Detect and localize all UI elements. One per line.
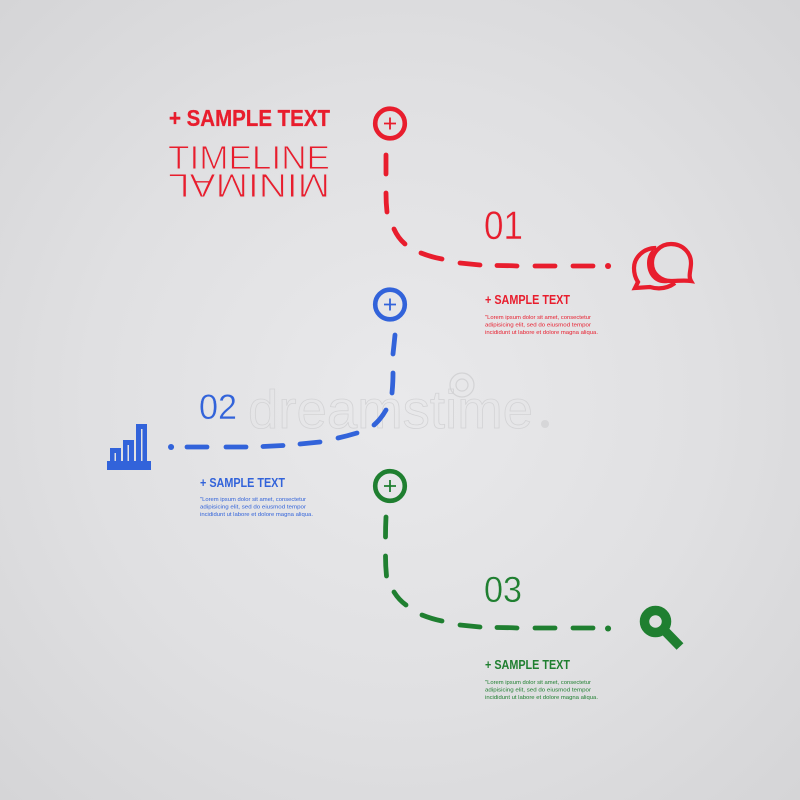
plus marker 03	[375, 471, 405, 501]
dashed path 03	[386, 517, 608, 628]
title: mirrored minimal: MINIMAL	[168, 167, 330, 204]
heading 02: + SAMPLE TEXT	[200, 476, 285, 490]
step 01: red timeline	[375, 109, 691, 336]
dashed path 02	[171, 335, 395, 447]
icon: speech bubbles	[634, 244, 691, 288]
icon: bar chart	[107, 424, 151, 470]
watermark: dreamstime	[248, 380, 533, 440]
dashed path 01	[386, 155, 608, 266]
body text 02	[200, 497, 313, 518]
icon: magnifying glass	[644, 610, 680, 646]
heading: sample text: + SAMPLE TEXT	[169, 105, 330, 131]
title: timeline: TIMELINE	[168, 139, 330, 176]
body text 02: "Lorem ipsum dolor sit amet, consectetur	[200, 497, 306, 503]
plus marker 02	[375, 290, 405, 319]
body text 01: incididunt ut labore et dolore magna aliqua.	[485, 330, 598, 336]
title block	[168, 105, 330, 204]
body text 03: adipisicing elit, sed do eiusmod tempor	[485, 688, 591, 694]
number 01: 01	[484, 204, 523, 248]
step 02: blue timeline	[107, 290, 405, 518]
body text 03	[485, 680, 598, 701]
body text 03: incididunt ut labore et dolore magna aliqua.	[485, 695, 598, 701]
number 03: 03	[484, 569, 522, 610]
plus marker 01	[375, 109, 405, 138]
body text 01	[485, 315, 598, 336]
heading 01: + SAMPLE TEXT	[485, 293, 570, 307]
heading 03: + SAMPLE TEXT	[485, 658, 570, 672]
step 03: green timeline	[375, 471, 680, 701]
body text 02: adipisicing elit, sed do eiusmod tempor	[200, 504, 306, 510]
body text 03: "Lorem ipsum dolor sit amet, consectetur	[485, 680, 591, 686]
number 02: 02	[199, 388, 237, 427]
body text 01: "Lorem ipsum dolor sit amet, consectetur	[485, 315, 591, 321]
body text 01: adipisicing elit, sed do eiusmod tempor	[485, 322, 591, 328]
body text 02: incididunt ut labore et dolore magna aliqua.	[200, 512, 313, 518]
